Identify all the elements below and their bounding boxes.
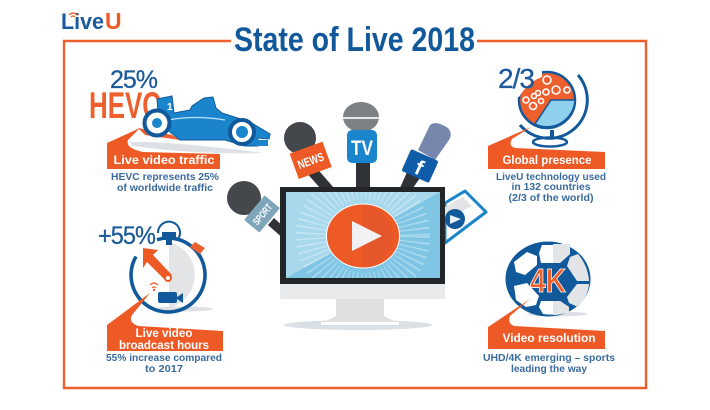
icon: globe [505,60,587,146]
panel: center monitor with microphones [227,102,486,330]
icon: microphone SPORT: SPORT [251,202,275,228]
description [106,352,222,375]
description: leading the way [511,363,587,375]
stat: +55%: +55% [98,222,156,250]
frame [64,41,646,388]
icon: play button [326,204,400,268]
banner: live video traffic [107,128,220,169]
description: 55% increase compared [106,352,222,364]
banner: video resolution: Video resolution [502,333,596,345]
stat: 2/3: 2/3 [498,63,534,94]
logo: LiveU: U [105,8,122,34]
starburst rays [311,184,415,288]
description: HEVC represents 25% [111,171,220,183]
icon: race car [130,96,270,153]
description [496,171,606,204]
banner: global presence: Global presence [502,155,592,167]
HEVC label: HEVC [89,85,161,126]
title: State of Live 2018 [234,21,475,59]
banner: live video traffic: Live video traffic [114,155,215,167]
banner: live video broadcast hours [107,293,223,352]
icon: microphone TV [343,102,379,188]
description: UHD/4K emerging – sports [483,352,615,364]
logo: LiveU [61,8,122,34]
icon: phone [445,191,486,243]
banner: live video broadcast hours: broadcast hours [119,340,209,352]
logo: LiveU: Live [61,9,104,34]
banner: global presence [488,127,605,169]
icon: microphone NEWS: NEWS [296,150,326,172]
description: of worldwide traffic [117,182,213,194]
stat: 25%: 25% [110,66,158,94]
icon: soccer ball: 4K [530,262,566,299]
icon: microphone facebook [400,123,451,188]
description [483,352,615,375]
description: LiveU technology used [496,171,606,183]
icon: race car: 1 [167,102,173,113]
icon: monitor [280,184,445,330]
icon: microphone NEWS [284,122,334,188]
description: (2/3 of the world) [508,192,594,204]
panel: live video traffic [89,66,270,194]
panel: global presence [488,60,606,204]
icon: microphone facebook: f [411,156,428,181]
panel: broadcast hours [98,222,223,375]
panel: video resolution [483,242,615,375]
icon: microphone SPORT [227,181,285,240]
description: in 132 countries [512,181,591,193]
icon: stopwatch [131,222,213,312]
icon: microphone TV: TV [351,137,373,160]
description: to 2017 [145,363,183,375]
description [111,171,220,194]
banner: live video broadcast hours: Live video [136,328,192,340]
